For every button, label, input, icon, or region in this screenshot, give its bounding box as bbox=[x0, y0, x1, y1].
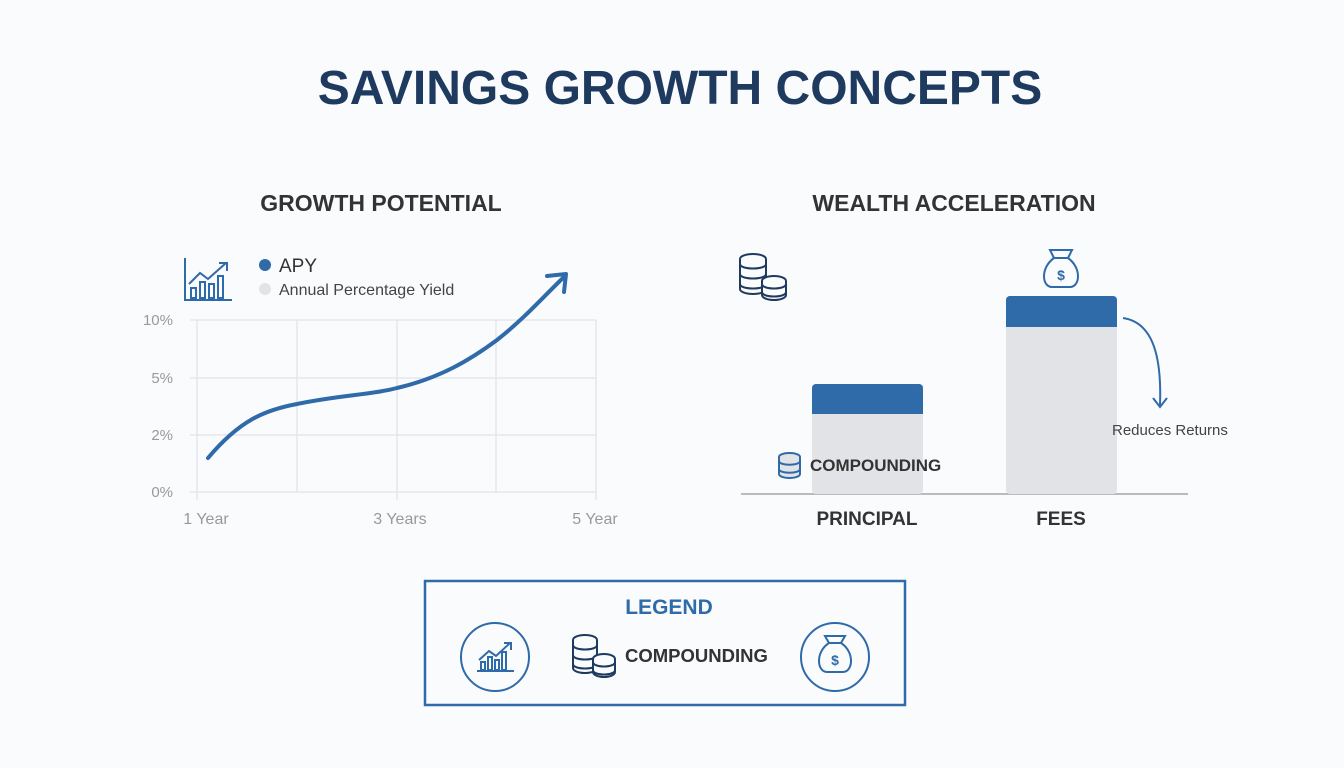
icon: coins bbox=[740, 254, 786, 300]
x-axis labels: 5 Year bbox=[572, 511, 618, 528]
arrow: reduces returns bbox=[1123, 318, 1167, 407]
callout text: Reduces Returns bbox=[1112, 422, 1228, 439]
legend title: LEGEND bbox=[625, 596, 713, 619]
y-axis labels: 2% bbox=[151, 427, 173, 444]
label: compounding: COMPOUNDING bbox=[810, 456, 941, 475]
panel: legend bbox=[425, 581, 905, 705]
panel: growth chart bbox=[143, 256, 618, 528]
icon: chart bbox=[185, 258, 232, 300]
legend: APY bbox=[259, 256, 454, 299]
legend: APY: APY bbox=[279, 256, 317, 277]
x-axis labels: 3 Years bbox=[373, 511, 427, 528]
arrowhead bbox=[547, 274, 566, 292]
label: fees: FEES bbox=[1036, 509, 1086, 530]
line: APY curve bbox=[208, 277, 564, 458]
icon: money bag bbox=[1044, 250, 1078, 287]
x-axis labels: 1 Year bbox=[183, 511, 229, 528]
y-axis labels bbox=[143, 312, 173, 501]
icon: money bag: $ bbox=[1057, 267, 1065, 283]
label: principal: PRINCIPAL bbox=[817, 509, 918, 530]
title: SAVINGS GROWTH CONCEPTS bbox=[318, 62, 1042, 115]
icon: chart circle bbox=[461, 623, 529, 691]
label: compounding: COMPOUNDING bbox=[625, 645, 768, 666]
bar: principal bbox=[812, 384, 923, 494]
y-axis labels: 0% bbox=[151, 484, 173, 501]
heading: wealth acceleration: WEALTH ACCELERATION bbox=[812, 190, 1096, 216]
icon: coins bbox=[573, 635, 615, 677]
legend: APY: Annual Percentage Yield bbox=[279, 282, 454, 299]
y-axis labels: 5% bbox=[151, 370, 173, 387]
bar: fees bbox=[1006, 296, 1117, 494]
panel: bar chart bbox=[740, 250, 1228, 530]
icon: coin stack bbox=[779, 453, 800, 478]
icon: money bag circle bbox=[801, 623, 869, 691]
y-axis labels: 10% bbox=[143, 312, 173, 329]
icon: money bag circle: $ bbox=[831, 652, 839, 668]
x-axis labels bbox=[183, 511, 618, 528]
heading: growth potential: GROWTH POTENTIAL bbox=[260, 190, 502, 216]
